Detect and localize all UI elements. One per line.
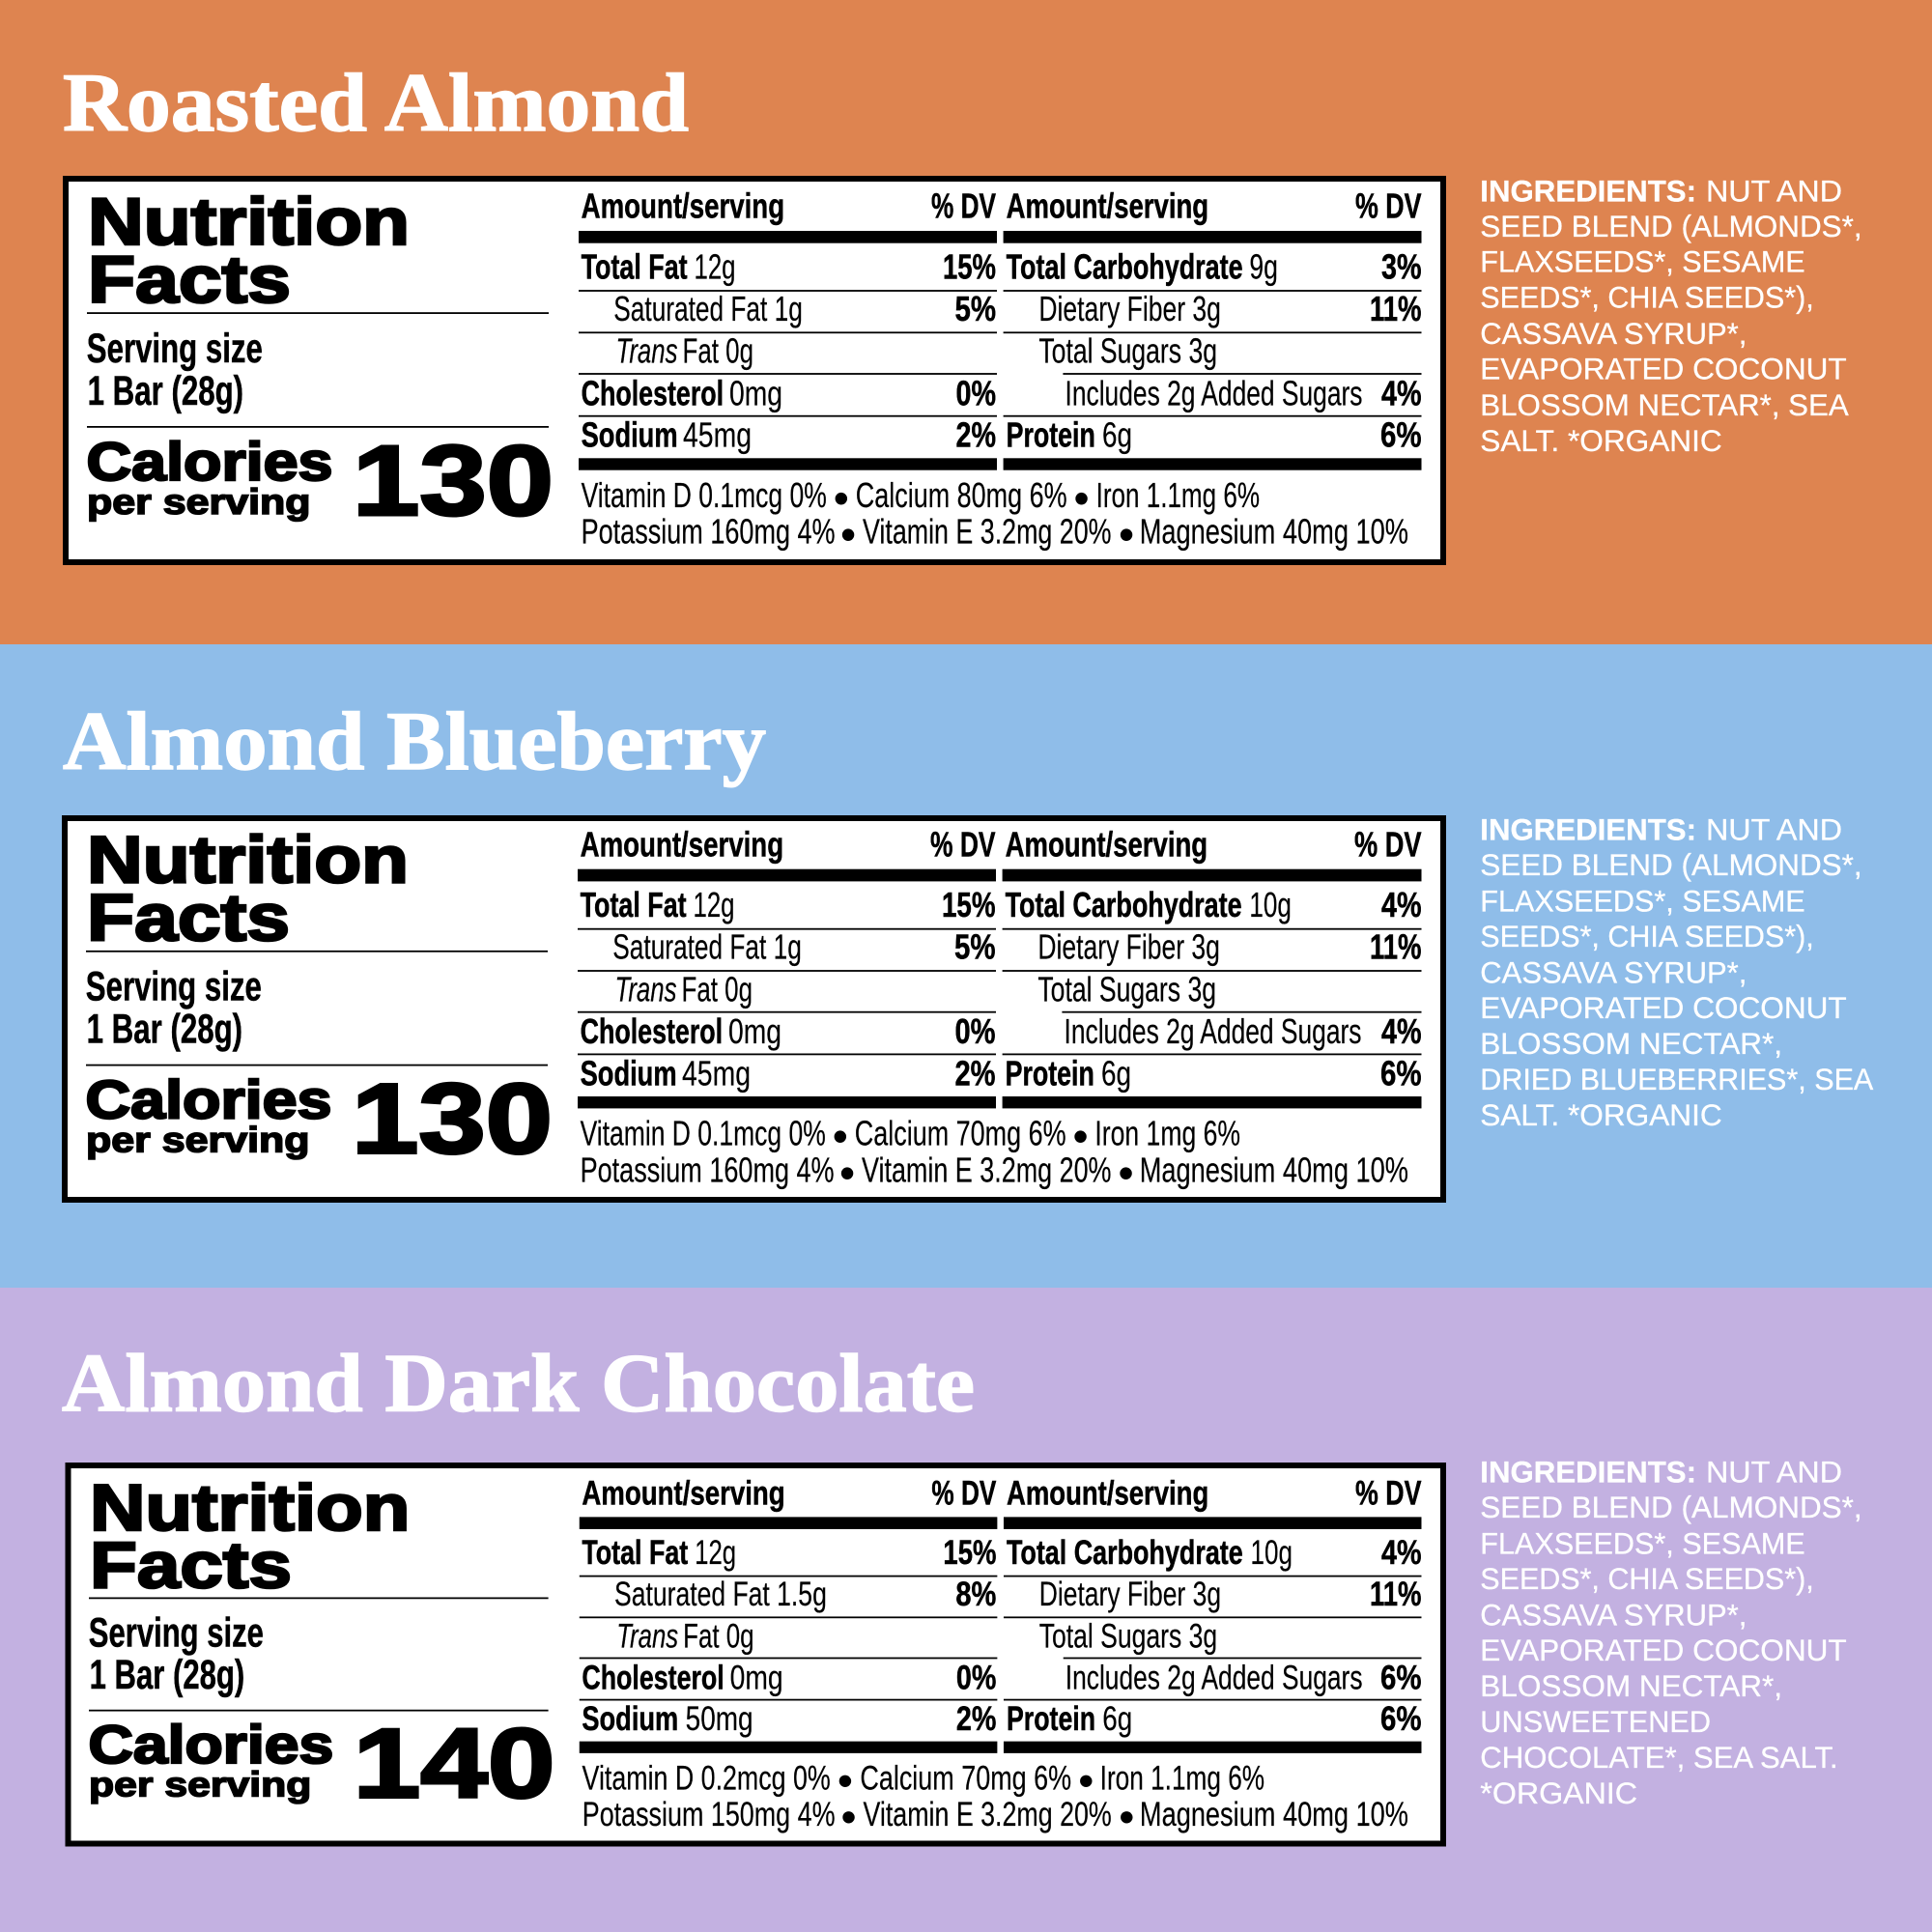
ingredients list: SEED BLEND (ALMONDS*, — [1480, 1490, 1862, 1524]
vitamins and minerals: Magnesium 40mg 10% — [1140, 1795, 1408, 1833]
vitamins and minerals: Calcium 70mg 6% — [860, 1759, 1071, 1798]
row: sodium and protein — [582, 415, 1422, 455]
vitamins and minerals: • — [833, 1111, 848, 1161]
calories: per serving — [87, 482, 311, 522]
calories — [87, 425, 554, 536]
row: total fat and total carbohydrate: 3% — [1381, 246, 1422, 286]
ingredients list: *ORGANIC — [1480, 1776, 1637, 1810]
row: cholesterol and added sugars: Cholesterol — [582, 1659, 724, 1696]
row: saturated fat and dietary fiber — [612, 927, 1422, 967]
ingredients list: BLOSSOM NECTAR*, — [1480, 1026, 1782, 1061]
vitamins and minerals: Vitamin D 0.1mcg 0% — [581, 1114, 826, 1153]
row: trans fat and total sugars — [616, 1617, 1217, 1655]
row: sodium and protein: 6% — [1380, 415, 1422, 455]
ingredients list: EVAPORATED COCONUT — [1480, 1633, 1847, 1667]
row: saturated fat and dietary fiber: 5% — [954, 927, 995, 967]
row: cholesterol and added sugars: Includes 2g Added Sugars — [1065, 1011, 1362, 1051]
vitamins and minerals: Calcium 70mg 6% — [855, 1114, 1066, 1153]
vitamins and minerals: Calcium 80mg 6% — [856, 475, 1067, 515]
row: sodium and protein: Protein — [1007, 415, 1095, 455]
row: cholesterol and added sugars — [581, 1011, 1422, 1051]
row: cholesterol and added sugars: 6% — [1380, 1659, 1421, 1696]
ingredients list — [1480, 1454, 1862, 1810]
row: cholesterol and added sugars: 4% — [1381, 1011, 1422, 1051]
row: total fat and total carbohydrate: Total Fat — [582, 246, 688, 286]
nutrition facts title — [87, 823, 409, 955]
row: total fat and total carbohydrate: Total Carbohydrate — [1006, 885, 1242, 924]
vitamins and minerals: Potassium 160mg 4% — [582, 512, 836, 552]
row: total fat and total carbohydrate — [582, 1533, 1421, 1572]
row: trans fat and total sugars: Total Sugars 3g — [1037, 969, 1216, 1009]
row: cholesterol and added sugars: Includes 2g Added Sugars — [1065, 1659, 1363, 1696]
heading: Roasted Almond: Roasted Almond — [63, 56, 689, 149]
row: cholesterol and added sugars — [582, 373, 1422, 412]
nutrition facts title: Facts — [88, 242, 291, 317]
vitamins and minerals: • — [840, 509, 856, 559]
heading: Almond Blueberry: Almond Blueberry — [63, 695, 766, 787]
vitamins and minerals: Vitamin E 3.2mg 20% — [863, 1795, 1112, 1833]
vitamins and minerals: Potassium 160mg 4% — [581, 1150, 835, 1189]
ingredients list: INGREDIENTS: — [1480, 1454, 1696, 1489]
ingredients list — [1480, 173, 1862, 458]
calories: Calories — [87, 431, 332, 492]
table header row — [581, 824, 1422, 864]
row: saturated fat and dietary fiber: 8% — [955, 1575, 996, 1613]
row: sodium and protein: 45mg — [683, 415, 752, 455]
row: sodium and protein: 6g — [1102, 415, 1132, 455]
nutrition facts title: Facts — [87, 881, 290, 955]
row: cholesterol and added sugars: 0mg — [728, 1011, 781, 1051]
calories — [85, 1064, 553, 1175]
row: total fat and total carbohydrate: 15% — [942, 885, 995, 924]
vitamins and minerals: Iron 1.1mg 6% — [1100, 1759, 1264, 1798]
vitamins and minerals: Vitamin D 0.1mcg 0% — [582, 475, 827, 515]
ingredients list: BLOSSOM NECTAR*, SEA — [1480, 387, 1849, 422]
nutrition facts title — [90, 1471, 410, 1602]
row: total fat and total carbohydrate: 12g — [695, 1533, 736, 1572]
row: cholesterol and added sugars: 0mg — [729, 373, 782, 412]
row: total fat and total carbohydrate — [581, 885, 1422, 924]
row: total fat and total carbohydrate: 15% — [943, 1533, 996, 1572]
panel background purple — [0, 1288, 1932, 1932]
row: saturated fat and dietary fiber: Saturated Fat 1g — [613, 289, 803, 328]
row: sodium and protein: 2% — [956, 1699, 996, 1738]
calories: 130 — [353, 425, 554, 536]
ingredients list: SEEDS*, CHIA SEEDS*), — [1480, 280, 1814, 315]
nutrition label box — [66, 179, 1443, 562]
table header row: % DV — [931, 186, 996, 226]
row: trans fat and total sugars: Fat 0g — [682, 969, 753, 1009]
ingredients list: NUT AND — [1706, 1454, 1842, 1489]
row: total fat and total carbohydrate: 12g — [694, 246, 736, 286]
table header row: % DV — [1355, 186, 1422, 226]
ingredients list: NUT AND — [1706, 173, 1842, 208]
panel: roasted almond — [0, 0, 1932, 644]
row: sodium and protein: 2% — [954, 1053, 995, 1093]
table header row: Amount/serving — [582, 186, 784, 226]
calories: Calories — [89, 1715, 333, 1775]
row: sodium and protein: 6% — [1380, 1699, 1421, 1738]
vitamins and minerals: Iron 1mg 6% — [1094, 1114, 1240, 1153]
row: cholesterol and added sugars: 0% — [956, 373, 996, 412]
panel background orange — [0, 0, 1932, 644]
row: total fat and total carbohydrate: Total Fat — [582, 1533, 688, 1572]
panel background blue — [0, 644, 1932, 1288]
row: sodium and protein: 2% — [956, 415, 996, 455]
nutrient table — [578, 824, 1422, 1198]
vitamins and minerals: Potassium 150mg 4% — [582, 1795, 836, 1833]
vitamins and minerals: Magnesium 40mg 10% — [1140, 1150, 1408, 1189]
vitamins and minerals: Vitamin D 0.2mcg 0% — [582, 1759, 831, 1798]
row: total fat and total carbohydrate — [582, 246, 1422, 286]
calories: Calories — [85, 1069, 332, 1130]
nutrition label box — [65, 818, 1443, 1200]
serving size: 1 Bar (28g) — [88, 368, 243, 414]
table header row: % DV — [930, 824, 995, 864]
row: sodium and protein: Protein — [1007, 1699, 1095, 1738]
heading: Almond Dark Chocolate: Almond Dark Chocolate — [62, 1337, 975, 1430]
row: trans fat and total sugars: Total Sugars 3g — [1038, 331, 1217, 371]
vitamins and minerals: Vitamin E 3.2mg 20% — [863, 512, 1111, 552]
table header row: Amount/serving — [1007, 1473, 1208, 1512]
ingredients list: INGREDIENTS: — [1480, 173, 1696, 208]
row: total fat and total carbohydrate: Total Carbohydrate — [1007, 246, 1243, 286]
vitamins and minerals: • — [834, 473, 849, 524]
ingredients list: EVAPORATED COCONUT — [1480, 990, 1847, 1025]
row: sodium and protein: 6g — [1102, 1699, 1132, 1738]
row: trans fat and total sugars: Trans — [614, 969, 676, 1009]
vitamins and minerals: • — [1078, 1756, 1094, 1805]
row: sodium and protein: Sodium — [581, 1053, 677, 1093]
vitamins and minerals: • — [840, 1793, 857, 1841]
row: total fat and total carbohydrate: 10g — [1249, 885, 1292, 924]
row: cholesterol and added sugars: 0mg — [730, 1659, 783, 1696]
table header row: Amount/serving — [582, 1473, 785, 1512]
row: saturated fat and dietary fiber: 5% — [954, 289, 996, 328]
vitamins and minerals: • — [1119, 1793, 1134, 1841]
row: sodium and protein: 45mg — [682, 1053, 751, 1093]
row: saturated fat and dietary fiber: Dietary Fiber 3g — [1037, 927, 1220, 967]
row: total fat and total carbohydrate: 4% — [1381, 885, 1422, 924]
table header row: % DV — [931, 1473, 996, 1512]
row: total fat and total carbohydrate: Total Carbohydrate — [1007, 1533, 1243, 1572]
row: trans fat and total sugars: Trans — [616, 1617, 678, 1655]
vitamins and minerals — [581, 1111, 1408, 1198]
row: saturated fat and dietary fiber: 11% — [1370, 927, 1422, 967]
calories — [89, 1709, 555, 1818]
row: saturated fat and dietary fiber: Saturated Fat 1g — [612, 927, 802, 967]
nutrient table — [579, 186, 1422, 559]
row: trans fat and total sugars: Total Sugars 3g — [1039, 1617, 1217, 1655]
vitamins and minerals: Magnesium 40mg 10% — [1140, 512, 1408, 552]
row: saturated fat and dietary fiber: Dietary Fiber 3g — [1038, 289, 1221, 328]
vitamins and minerals: • — [1074, 473, 1090, 524]
serving size: Serving size — [87, 326, 263, 372]
table header row: Amount/serving — [581, 824, 783, 864]
row: cholesterol and added sugars: Cholesterol — [581, 1011, 723, 1051]
row: saturated fat and dietary fiber: Saturated Fat 1.5g — [614, 1575, 827, 1613]
row: total fat and total carbohydrate: 12g — [694, 885, 734, 924]
nutrition facts title: Nutrition — [87, 823, 409, 897]
nutrition facts summary column — [85, 823, 553, 1175]
table header row: % DV — [1355, 1473, 1422, 1512]
nutrition facts title: Facts — [90, 1529, 292, 1602]
nutrition facts summary column — [89, 1471, 555, 1818]
row: cholesterol and added sugars: Includes 2g Added Sugars — [1065, 373, 1362, 412]
nutrition facts title: Nutrition — [90, 1471, 410, 1545]
row: cholesterol and added sugars: 0% — [956, 1659, 996, 1696]
serving size: Serving size — [86, 964, 262, 1010]
row: sodium and protein: Protein — [1006, 1053, 1094, 1093]
row: cholesterol and added sugars: Cholesterol — [582, 373, 724, 412]
ingredients list: SEEDS*, CHIA SEEDS*), — [1480, 1561, 1814, 1596]
serving size: Serving size — [89, 1610, 264, 1657]
ingredients list: CHOCOLATE*, SEA SALT. — [1480, 1740, 1838, 1775]
ingredients list: FLAXSEEDS*, SESAME — [1480, 244, 1805, 279]
calories: 130 — [352, 1064, 553, 1175]
row: total fat and total carbohydrate: 9g — [1249, 246, 1278, 286]
table header row — [582, 186, 1422, 226]
ingredients list: CASSAVA SYRUP*, — [1480, 316, 1747, 351]
ingredients list: SEED BLEND (ALMONDS*, — [1480, 209, 1862, 243]
vitamins and minerals: • — [1118, 1148, 1134, 1198]
ingredients list — [1480, 811, 1873, 1132]
ingredients list: CASSAVA SYRUP*, — [1480, 954, 1747, 989]
ingredients list: EVAPORATED COCONUT — [1480, 352, 1847, 386]
serving size — [86, 964, 262, 1053]
ingredients list: NUT AND — [1706, 811, 1842, 846]
ingredients list: FLAXSEEDS*, SESAME — [1480, 1525, 1805, 1560]
calories: per serving — [86, 1121, 309, 1160]
table header row — [582, 1473, 1422, 1512]
row: total fat and total carbohydrate: Total Fat — [581, 885, 687, 924]
vitamins and minerals: • — [838, 1756, 853, 1805]
row: trans fat and total sugars: Fat 0g — [683, 1617, 754, 1655]
row: total fat and total carbohydrate: 15% — [943, 246, 996, 286]
row: saturated fat and dietary fiber — [614, 1575, 1421, 1613]
nutrition label box — [68, 1465, 1443, 1843]
row: trans fat and total sugars: Trans — [616, 331, 678, 371]
row: cholesterol and added sugars — [582, 1659, 1421, 1696]
nutrition facts title — [88, 185, 410, 317]
table header row: Amount/serving — [1006, 824, 1208, 864]
row: saturated fat and dietary fiber: 11% — [1370, 289, 1422, 328]
ingredients list: SALT. *ORGANIC — [1480, 423, 1722, 458]
row: sodium and protein — [582, 1699, 1421, 1738]
row: saturated fat and dietary fiber: Dietary Fiber 3g — [1039, 1575, 1221, 1613]
row: sodium and protein: 6g — [1101, 1053, 1131, 1093]
ingredients list: DRIED BLUEBERRIES*, SEA — [1480, 1062, 1873, 1096]
ingredients list: FLAXSEEDS*, SESAME — [1480, 883, 1805, 918]
ingredients list: BLOSSOM NECTAR*, — [1480, 1668, 1782, 1703]
row: sodium and protein: 6% — [1380, 1053, 1422, 1093]
ingredients list: SALT. *ORGANIC — [1480, 1097, 1722, 1132]
ingredients list: SEED BLEND (ALMONDS*, — [1480, 847, 1862, 882]
row: sodium and protein: Sodium — [582, 415, 678, 455]
serving size: 1 Bar (28g) — [90, 1652, 244, 1698]
row: saturated fat and dietary fiber — [613, 289, 1422, 328]
serving size: 1 Bar (28g) — [87, 1007, 242, 1053]
ingredients list: SEEDS*, CHIA SEEDS*), — [1480, 919, 1814, 953]
nutrient table — [580, 1473, 1422, 1841]
vitamins and minerals: Iron 1.1mg 6% — [1096, 475, 1260, 515]
serving size — [89, 1610, 264, 1698]
row: trans fat and total sugars — [616, 331, 1217, 371]
row: sodium and protein: Sodium — [582, 1699, 678, 1738]
row: total fat and total carbohydrate: 10g — [1251, 1533, 1293, 1572]
ingredients list: UNSWEETENED — [1480, 1704, 1711, 1739]
nutrition facts title: Nutrition — [88, 185, 410, 259]
row: cholesterol and added sugars: 4% — [1381, 373, 1422, 412]
vitamins and minerals — [582, 1756, 1408, 1841]
calories: 140 — [354, 1709, 555, 1818]
vitamins and minerals: Vitamin E 3.2mg 20% — [862, 1150, 1111, 1189]
row: total fat and total carbohydrate: 4% — [1381, 1533, 1421, 1572]
table header row: % DV — [1354, 824, 1422, 864]
ingredients list: CASSAVA SYRUP*, — [1480, 1597, 1747, 1632]
row: trans fat and total sugars: Fat 0g — [682, 331, 753, 371]
row: sodium and protein: 50mg — [686, 1699, 753, 1738]
serving size — [87, 326, 263, 414]
table header row: Amount/serving — [1007, 186, 1208, 226]
nutrition facts summary column — [87, 185, 554, 536]
panel: almond blueberry — [0, 644, 1932, 1288]
vitamins and minerals: • — [839, 1148, 855, 1198]
calories: per serving — [89, 1765, 311, 1804]
row: cholesterol and added sugars: 0% — [954, 1011, 995, 1051]
row: saturated fat and dietary fiber: 11% — [1370, 1575, 1421, 1613]
ingredients list: INGREDIENTS: — [1480, 811, 1696, 846]
vitamins and minerals: • — [1119, 509, 1134, 559]
vitamins and minerals — [582, 473, 1408, 559]
panel: almond dark chocolate — [0, 1288, 1932, 1932]
vitamins and minerals: • — [1073, 1111, 1089, 1161]
row: sodium and protein — [581, 1053, 1422, 1093]
row: trans fat and total sugars — [614, 969, 1216, 1009]
